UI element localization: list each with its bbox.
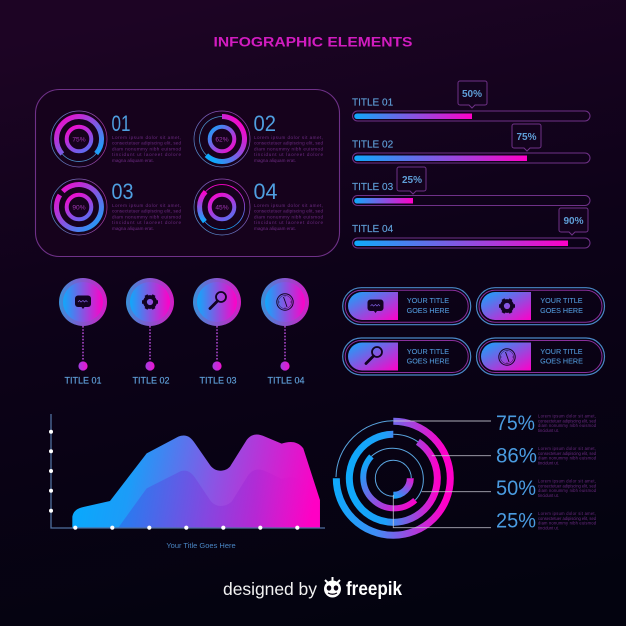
panel: pill buttons bbox=[343, 288, 604, 375]
note 25%: Lorem ipsum dolor sit amet, bbox=[538, 511, 596, 516]
note 86%: consectetuer adipiscing elit, sed bbox=[538, 451, 597, 456]
panel: progress bars bbox=[352, 81, 590, 248]
icon: freepik mascot bbox=[324, 577, 341, 598]
percent 50%: 50% bbox=[496, 477, 536, 500]
radial chart bbox=[336, 421, 491, 535]
text block 04: tincidunt ut laoreet dolore bbox=[254, 220, 323, 225]
text block 04: diam nonummy nibh euismod bbox=[254, 214, 323, 219]
bar 02 bbox=[352, 124, 590, 163]
donut 04 bbox=[194, 179, 250, 235]
bar 03: 25% bbox=[402, 175, 422, 186]
pill 04: GOES HERE bbox=[540, 356, 583, 366]
percent list bbox=[496, 412, 597, 532]
pill 02: YOUR TITLE bbox=[540, 296, 583, 305]
note 86%: Lorem ipsum dolor sit amet, bbox=[538, 446, 596, 451]
y axis points bbox=[49, 430, 53, 513]
title: INFOGRAPHIC ELEMENTS bbox=[214, 34, 413, 50]
number 03: 03 bbox=[112, 179, 134, 204]
text block 03: magna aliquam erat. bbox=[112, 226, 154, 231]
percent 86%: 86% bbox=[496, 444, 537, 468]
bar 02: 75% bbox=[516, 132, 537, 143]
note 75% bbox=[538, 414, 597, 433]
note 25%: tincidunt ut. bbox=[538, 525, 559, 530]
percent 75%: 75% bbox=[496, 412, 535, 435]
pill 03 bbox=[343, 338, 471, 375]
timeline item 01: TITLE 01 bbox=[64, 376, 102, 386]
note 50%: tincidunt ut. bbox=[538, 493, 559, 498]
note 86%: tincidunt ut. bbox=[538, 460, 559, 465]
donut 03 value: 90% bbox=[72, 204, 86, 212]
chart caption: Your Title Goes Here bbox=[166, 541, 236, 550]
note 75%: Lorem ipsum dolor sit amet, bbox=[538, 414, 596, 418]
ring 86% bbox=[349, 434, 437, 522]
timeline item 04 bbox=[261, 278, 309, 386]
pill 01: YOUR TITLE bbox=[407, 296, 449, 305]
timeline item 03: TITLE 03 bbox=[199, 376, 237, 386]
text block 03: consectetuer adipiscing elit, sed bbox=[112, 209, 181, 214]
x axis points bbox=[73, 526, 299, 530]
text block 03: diam nonummy nibh euismod bbox=[112, 214, 181, 219]
bar 01: 50% bbox=[462, 89, 482, 100]
text block 02: Lorem ipsum dolor sit amet, bbox=[254, 135, 323, 140]
chart areas bbox=[72, 434, 320, 528]
text block 01: Lorem ipsum dolor sit amet, bbox=[112, 135, 181, 140]
text block 02: magna aliquam erat. bbox=[254, 158, 296, 163]
note 50% bbox=[538, 478, 597, 498]
text block 01: magna aliquam erat. bbox=[112, 158, 154, 163]
footer: designed by freepik: designed by bbox=[223, 579, 317, 599]
bar 04: 90% bbox=[563, 216, 584, 227]
text block 03 bbox=[112, 203, 181, 231]
timeline item 03 bbox=[193, 278, 241, 386]
bar 03 bbox=[352, 167, 590, 206]
donut 01 value: 75% bbox=[72, 136, 86, 144]
text block 04: magna aliquam erat. bbox=[254, 226, 296, 231]
bar 01: TITLE 01 bbox=[352, 98, 394, 108]
donut 04 value: 45% bbox=[215, 204, 229, 212]
pill 03: YOUR TITLE bbox=[407, 347, 449, 356]
footer: designed by freepik: freepik bbox=[346, 579, 402, 600]
bar 01 bbox=[352, 81, 590, 121]
timeline item 04: TITLE 04 bbox=[267, 376, 305, 386]
bar 02: TITLE 02 bbox=[352, 140, 394, 151]
note 86%: diam nonummy nibh euismod bbox=[538, 456, 597, 461]
timeline item 02 bbox=[126, 278, 174, 386]
number 01: 01 bbox=[112, 111, 130, 136]
leader lines bbox=[393, 421, 491, 528]
text block 01: consectetuer adipiscing elit, sed bbox=[112, 141, 181, 146]
pill 02: GOES HERE bbox=[540, 306, 583, 315]
pill 04 bbox=[476, 338, 604, 375]
donut 02 bbox=[194, 111, 250, 167]
timeline item 02: TITLE 02 bbox=[132, 376, 170, 386]
pill 02 bbox=[476, 288, 604, 325]
text block 02 bbox=[254, 135, 323, 163]
text block 04: consectetuer adipiscing elit, sed bbox=[254, 209, 323, 214]
pill 03: GOES HERE bbox=[407, 356, 450, 366]
note 50%: diam nonummy nibh euismod bbox=[538, 488, 597, 493]
text block 03: tincidunt ut laoreet dolore bbox=[112, 220, 181, 225]
pill 04: YOUR TITLE bbox=[540, 347, 583, 356]
panel: four donut statistics bbox=[36, 90, 340, 256]
number 02: 02 bbox=[254, 111, 276, 136]
number 04: 04 bbox=[254, 179, 278, 204]
timeline item 01 bbox=[59, 278, 107, 386]
text block 01: diam nonummy nibh euismod bbox=[112, 146, 181, 151]
panel: four timeline icons bbox=[59, 278, 309, 386]
pill 01 bbox=[343, 288, 471, 325]
ring 50% bbox=[363, 448, 423, 508]
pill 01: GOES HERE bbox=[407, 306, 450, 315]
ring 25% bbox=[375, 460, 411, 496]
donut 02 value: 62% bbox=[215, 136, 229, 144]
bar 03: TITLE 03 bbox=[352, 182, 394, 193]
text block 02: consectetuer adipiscing elit, sed bbox=[254, 141, 323, 146]
text block 02: diam nonummy nibh euismod bbox=[254, 146, 323, 151]
text block 02: tincidunt ut laoreet dolore bbox=[254, 152, 323, 157]
note 25% bbox=[538, 511, 597, 530]
note 25%: consectetuer adipiscing elit, sed bbox=[538, 516, 597, 521]
note 50%: Lorem ipsum dolor sit amet, bbox=[538, 478, 596, 484]
text block 04: Lorem ipsum dolor sit amet, bbox=[254, 203, 323, 208]
note 75%: consectetuer adipiscing elit, sed bbox=[538, 418, 597, 423]
note 50%: consectetuer adipiscing elit, sed bbox=[538, 483, 597, 488]
text block 03: Lorem ipsum dolor sit amet, bbox=[112, 203, 181, 208]
bar 04 bbox=[352, 208, 590, 248]
ring 75% bbox=[336, 421, 450, 535]
footer: designed by freepik bbox=[223, 577, 402, 600]
note 75%: tincidunt ut. bbox=[538, 428, 559, 433]
bar 04: TITLE 04 bbox=[352, 224, 394, 235]
note 86% bbox=[538, 446, 597, 465]
text block 01 bbox=[112, 135, 181, 163]
text block 01: tincidunt ut laoreet dolore bbox=[112, 152, 181, 157]
donut 03 bbox=[51, 179, 107, 235]
chart axes bbox=[51, 414, 325, 528]
percent 25%: 25% bbox=[496, 510, 536, 532]
area chart bbox=[49, 414, 325, 550]
note 25%: diam nonummy nibh euismod bbox=[538, 521, 597, 526]
text block 04 bbox=[254, 203, 323, 231]
note 75%: diam nonummy nibh euismod bbox=[538, 423, 597, 428]
donut 01 bbox=[51, 111, 107, 167]
